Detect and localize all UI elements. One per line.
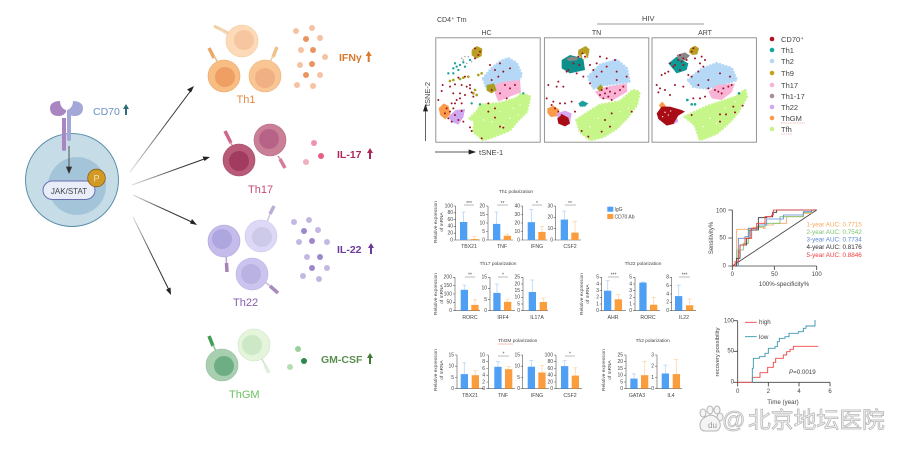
chart: CSF2 — [547, 201, 581, 250]
label: IFNγ up — [339, 51, 372, 64]
chart: IL17A: IL17A — [530, 315, 544, 321]
panel: Th22 polarization bars: Th22 polarization — [625, 261, 662, 267]
heading: HIV: HIV — [642, 14, 655, 23]
chart: TNF — [479, 352, 515, 399]
chart: IL4 — [651, 352, 682, 399]
chart: TBX21: TBX21 — [462, 393, 478, 399]
chart: GATA3: 5 — [620, 379, 623, 385]
chart: ROC curves: 100 — [812, 272, 822, 278]
chart: ROC curves — [709, 209, 862, 288]
chart: CSF2: 20 — [547, 379, 553, 385]
panel: ThGM polarization bars: Relative expression — [433, 349, 439, 391]
chart: TBX21: 10 — [448, 364, 454, 370]
chart: recovery Kaplan-Meier: 4 — [797, 389, 801, 395]
legend: tSNE populations: Tfh — [781, 125, 792, 134]
legend: tSNE populations: Th9 — [781, 69, 794, 78]
chart: TNF: 2 — [482, 379, 485, 385]
legend: tSNE populations: Th1-17 — [781, 92, 805, 101]
chart: IL17A: 5 — [517, 301, 520, 307]
legend: tSNE populations: Th22 — [781, 103, 798, 112]
chart: IL22: 8 — [666, 275, 669, 281]
chart: TBX21: 60 — [447, 217, 453, 223]
chart: TBX21: 80 — [447, 210, 453, 216]
chart: IRF4: 10 — [481, 286, 487, 292]
panel: ThGM polarization bars: ThGM polarization — [498, 338, 538, 344]
chart: RORC: 0 — [629, 308, 632, 314]
chart: RORC: 1 — [629, 301, 632, 307]
chart: IFNG — [514, 201, 548, 250]
chart: IFNG: * — [536, 201, 538, 207]
panel: Th1 — [208, 25, 372, 106]
arrow: to Th1 — [130, 86, 194, 172]
chart: TNF: ** — [501, 201, 504, 207]
chart: TBX21: 5 — [451, 375, 454, 381]
chart: IRF4: * — [502, 272, 504, 278]
legend: AUC values: 1-year AUC: 0.7715 — [806, 222, 862, 228]
legend: AUC values: 3-year AUC: 0.7734 — [806, 236, 862, 244]
chart: IL22: 6 — [666, 283, 669, 289]
chart: AHR: 1 — [596, 301, 599, 307]
chart: IL4: 2 — [651, 364, 654, 370]
chart: CSF2: * — [569, 352, 571, 358]
icon: GM-CSF secreted dots — [287, 346, 307, 370]
chart: RORC: ** — [468, 272, 472, 278]
arrow: signal to JAK/STAT — [66, 146, 72, 173]
chart: RORC: 0 — [449, 308, 452, 314]
chart: CSF2: 80 — [547, 359, 553, 365]
chart: AHR — [596, 272, 626, 321]
panel: ThGM polarization bars — [433, 338, 582, 399]
chart: IL4: 1 — [651, 375, 654, 381]
chart: TBX21: 20 — [447, 231, 453, 237]
icon: phosphate: P — [93, 174, 100, 184]
chart: TBX21: 15 — [448, 352, 454, 358]
arrow: to Th17 — [132, 156, 210, 185]
chart: IFNG: 5 — [517, 375, 520, 381]
legend: tSNE populations: ThGM — [781, 114, 802, 123]
chart: GATA3: 20 — [617, 359, 623, 365]
panel: tSNE ART: ART — [698, 30, 713, 37]
panel: Th2 polarization bars: of mRNA — [607, 359, 613, 380]
chart: AHR: 5 — [596, 275, 599, 281]
chart: GATA3: 10 — [617, 373, 623, 379]
chart: recovery Kaplan-Meier: 6 — [828, 389, 832, 395]
chart: TBX21: TBX21 — [461, 244, 477, 250]
chart: TNF: 4 — [482, 373, 485, 379]
chart: TBX21 — [445, 201, 480, 250]
chart: recovery Kaplan-Meier — [715, 319, 832, 406]
chart: CSF2: 60 — [547, 366, 553, 372]
label: Th1: Th1 — [236, 94, 255, 106]
arrow: to ThGM — [133, 217, 171, 295]
chart: recovery Kaplan-Meier: P=0.0019 — [789, 369, 816, 376]
legend: AUC values: 4-year AUC: 0.8176 — [806, 244, 862, 251]
chart: IL17A: 0 — [517, 308, 520, 314]
panel: Th22 — [208, 206, 374, 309]
panel: Th1 polarization bars: Relative expression — [433, 201, 439, 243]
label: ThGM: ThGM — [229, 389, 260, 401]
chart: IRF4 — [481, 272, 515, 321]
chart: GATA3 — [617, 352, 651, 399]
legend: tSNE populations — [770, 35, 805, 134]
chart: ROC curves: 50 — [719, 236, 727, 242]
legend: IgG / CD70 Ab: CD70 Ab — [614, 214, 635, 220]
chart: AHR: AHR — [608, 315, 619, 321]
chart: IL4: 3 — [651, 352, 654, 358]
chart: RORC: RORC — [462, 315, 478, 321]
chart: RORC: 2 — [629, 295, 632, 301]
chart: IFNG: IFNG — [531, 244, 543, 250]
chart: IRF4: 0 — [484, 308, 487, 314]
chart: ROC curves: 100%-specificity% — [759, 281, 810, 288]
chart: GATA3: GATA3 — [629, 393, 645, 399]
chart: AHR: *** — [611, 272, 616, 278]
label: tSNE-2 axis — [423, 82, 432, 141]
chart: recovery Kaplan-Meier: 2 — [767, 389, 771, 395]
panel: Th1 polarization bars — [433, 189, 581, 250]
chart: recovery Kaplan-Meier: recovery possibility — [715, 327, 721, 376]
chart: IFNG: 30 — [514, 212, 520, 218]
label: IFNγ up: IFNγ — [339, 52, 362, 64]
chart: IL17A: 25 — [514, 275, 520, 281]
chart: RORC — [444, 272, 480, 321]
chart: IL22: *** — [682, 272, 687, 278]
icon: paw — [700, 406, 723, 431]
chart: TBX21: 0 — [451, 386, 454, 392]
icon: Th22 cells — [208, 206, 278, 293]
legend: IgG / CD70 Ab — [607, 207, 635, 220]
chart: recovery Kaplan-Meier: 0 — [731, 380, 735, 386]
chart: TBX21: 0 — [450, 237, 453, 243]
label: tSNE-1 axis — [435, 148, 503, 157]
chart: IL17A: 10 — [514, 295, 520, 301]
chart: TBX21: 100 — [445, 203, 453, 209]
chart: TNF: 5 — [482, 229, 485, 235]
chart: TNF: 20 — [479, 203, 485, 209]
chart: TBX21 — [448, 352, 484, 399]
chart: CSF2: CSF2 — [563, 393, 577, 399]
chart: IRF4: 5 — [484, 297, 487, 303]
watermark: Baidu hospital mark: 北京地坛医院 — [748, 402, 885, 435]
chart: CSF2: 0 — [550, 386, 553, 392]
panel: Th2 polarization bars: Relative expression — [601, 349, 607, 391]
chart: IFNG — [514, 352, 549, 399]
legend: IgG / CD70 Ab: IgG — [614, 207, 623, 213]
chart: IL17A: 20 — [514, 281, 520, 287]
chart: RORC: RORC — [640, 315, 656, 321]
legend: tSNE populations: Th17 — [781, 81, 798, 90]
chart: recovery Kaplan-Meier: 100 — [724, 319, 735, 325]
chart: TNF: TNF — [497, 244, 507, 250]
chart: RORC: 4 — [629, 281, 632, 287]
chart: IL22: 2 — [666, 300, 669, 306]
chart: IL22 — [666, 272, 696, 321]
chart: recovery Kaplan-Meier: 50 — [727, 349, 735, 355]
chart: GATA3: 15 — [617, 366, 623, 372]
chart: TNF: 6 — [482, 366, 485, 372]
chart: TNF: 0 — [482, 386, 485, 392]
chart: IFNG: 40 — [514, 203, 520, 209]
chart: TNF: 15 — [479, 212, 485, 218]
chart: ROC curves: Sensitivity% — [709, 221, 715, 254]
chart: RORC: 50 — [446, 300, 452, 306]
icon: IL-22 secreted dots — [291, 217, 330, 282]
chart: TBX21: 40 — [447, 224, 453, 230]
chart: IFNG: 0 — [517, 237, 520, 243]
chart: TNF: TNF — [498, 393, 508, 399]
chart: CSF2: 100 — [545, 352, 553, 358]
panel: Th22 polarization bars: of mRNA — [585, 283, 591, 304]
panel: Th1 polarization bars: Th1 polarization — [499, 189, 533, 195]
icon: Th1 cells — [208, 25, 281, 92]
panel: Th17 — [223, 124, 373, 196]
chart: recovery Kaplan-Meier: Time (year) — [767, 399, 799, 406]
chart: CSF2 — [545, 352, 582, 399]
chart: GATA3: 0 — [620, 386, 623, 392]
panel: tSNE TN — [544, 30, 649, 142]
chart: RORC: 5 — [629, 275, 632, 281]
chart: IRF4: 15 — [481, 275, 487, 281]
chart: IL17A: 15 — [514, 288, 520, 294]
heading: CD4+ Tm: CD4⁺ Tm — [437, 17, 467, 24]
watermark: Baidu hospital mark: du — [708, 421, 717, 430]
chart: TNF — [479, 201, 513, 250]
chart: IL22: 0 — [666, 308, 669, 314]
chart: CSF2: 20 — [547, 215, 553, 221]
icon: ThGM cells — [206, 329, 270, 381]
panel: tSNE HC — [436, 30, 540, 142]
label: tSNE-1 axis: tSNE-1 — [479, 148, 503, 157]
legend: AUC values — [806, 222, 862, 259]
chart: RORC: 150 — [444, 283, 452, 289]
chart: TNF: 8 — [482, 359, 485, 365]
chart: CSF2: 10 — [547, 226, 553, 232]
chart: CSF2: 30 — [547, 203, 553, 209]
chart: IL22: IL22 — [679, 315, 689, 321]
panel: Th17 polarization bars: Th17 polarization — [480, 261, 517, 267]
chart: IFNG: 15 — [514, 352, 520, 358]
chart: TNF: 10 — [479, 352, 485, 358]
chart: IL17A — [514, 275, 548, 321]
panel: tSNE ART — [652, 30, 756, 142]
label: CD70 up: CD70 — [93, 106, 120, 118]
legend: tSNE populations: Th1 — [781, 46, 794, 55]
chart: IFNG: 10 — [514, 229, 520, 235]
chart: TNF: 10 — [479, 220, 485, 226]
label: IL-17 up — [337, 148, 373, 161]
chart: AHR: 2 — [596, 295, 599, 301]
chart: TNF: * — [503, 352, 505, 358]
chart: AHR: 3 — [596, 288, 599, 294]
chart: IFNG: IFNG — [531, 393, 543, 399]
chart: TNF: 0 — [482, 237, 485, 243]
heading: HIV — [597, 14, 704, 24]
icon: T cell — [26, 134, 118, 226]
icon: IFNγ secreted dots — [293, 25, 328, 89]
icon: CD70 receptor — [50, 101, 83, 151]
chart: recovery Kaplan-Meier: 0 — [736, 389, 740, 395]
chart: IL4: IL4 — [667, 393, 675, 399]
panel: Th17 polarization bars: Relative expression — [433, 273, 439, 315]
panel: Th1 polarization bars: of mRNA — [439, 211, 445, 232]
panel: ThGM polarization bars: of mRNA — [439, 359, 445, 380]
label: GM-CSF up: GM-CSF — [321, 354, 363, 366]
chart: IFNG: 0 — [517, 386, 520, 392]
chart: AHR: 4 — [596, 281, 599, 287]
panel: Th2 polarization bars: Th2 polarization — [636, 338, 670, 344]
legend: tSNE populations: CD70⁺ — [781, 35, 804, 44]
legend: tSNE populations: Th2 — [781, 57, 794, 66]
arrow: to Th22 — [133, 195, 197, 225]
panel: ThGM — [206, 329, 373, 401]
label: Th17: Th17 — [248, 184, 273, 196]
chart: ROC curves: 0 — [731, 272, 735, 278]
label: IL-17 up: IL-17 — [337, 149, 362, 161]
label: JAK/STAT pill: JAK/STAT — [51, 187, 87, 196]
chart: IFNG: 20 — [514, 220, 520, 226]
watermark: Baidu hospital mark: @ — [722, 407, 745, 433]
chart: ROC curves: 100 — [716, 209, 727, 215]
panel: Th17 polarization bars: of mRNA — [439, 283, 445, 304]
chart: RORC: 200 — [444, 275, 452, 281]
chart: AHR: 0 — [596, 308, 599, 314]
chart: recovery Kaplan-Meier: low — [759, 334, 769, 341]
chart: GATA3: 25 — [617, 352, 623, 358]
chart: recovery Kaplan-Meier: high — [759, 319, 771, 326]
panel: Th22 polarization bars: Relative expression — [579, 273, 585, 315]
label: IL-22 up: IL-22 — [337, 244, 362, 256]
panel: Th17 polarization bars — [433, 261, 548, 321]
label: Th22: Th22 — [233, 297, 258, 309]
panel: Th22 polarization bars — [579, 261, 696, 321]
chart: TBX21: *** — [466, 201, 472, 207]
panel: CD70 signalling schematic — [26, 101, 129, 226]
chart: CSF2: ** — [568, 201, 572, 207]
label: IL-22 up — [337, 243, 374, 256]
chart: ROC curves: 0 — [723, 264, 727, 270]
label: tSNE-2 axis: tSNE-2 — [423, 82, 432, 106]
chart: IFNG: 10 — [514, 364, 520, 370]
chart: IL22: 4 — [666, 291, 669, 297]
chart: RORC: 3 — [629, 288, 632, 294]
icon: Th17 cells — [223, 124, 286, 176]
panel: Th2 polarization bars — [601, 338, 682, 399]
chart: ROC curves: 50 — [771, 272, 778, 278]
panel: tSNE TN: TN — [592, 30, 601, 37]
chart: RORC — [629, 275, 660, 321]
chart: CSF2: 40 — [547, 373, 553, 379]
chart: CSF2: CSF2 — [563, 244, 577, 250]
chart: RORC: 100 — [444, 291, 452, 297]
chart: IRF4: IRF4 — [497, 315, 509, 321]
chart: IL4: 0 — [651, 386, 654, 392]
chart: CSF2: 0 — [550, 237, 553, 243]
legend: AUC values: 2-year AUC: 0.7542 — [806, 229, 862, 236]
icon: IL-17 secreted dots — [303, 140, 324, 165]
panel: tSNE HC: HC — [481, 30, 492, 37]
legend: AUC values: 5-year AUC: 0.8846 — [806, 252, 862, 259]
